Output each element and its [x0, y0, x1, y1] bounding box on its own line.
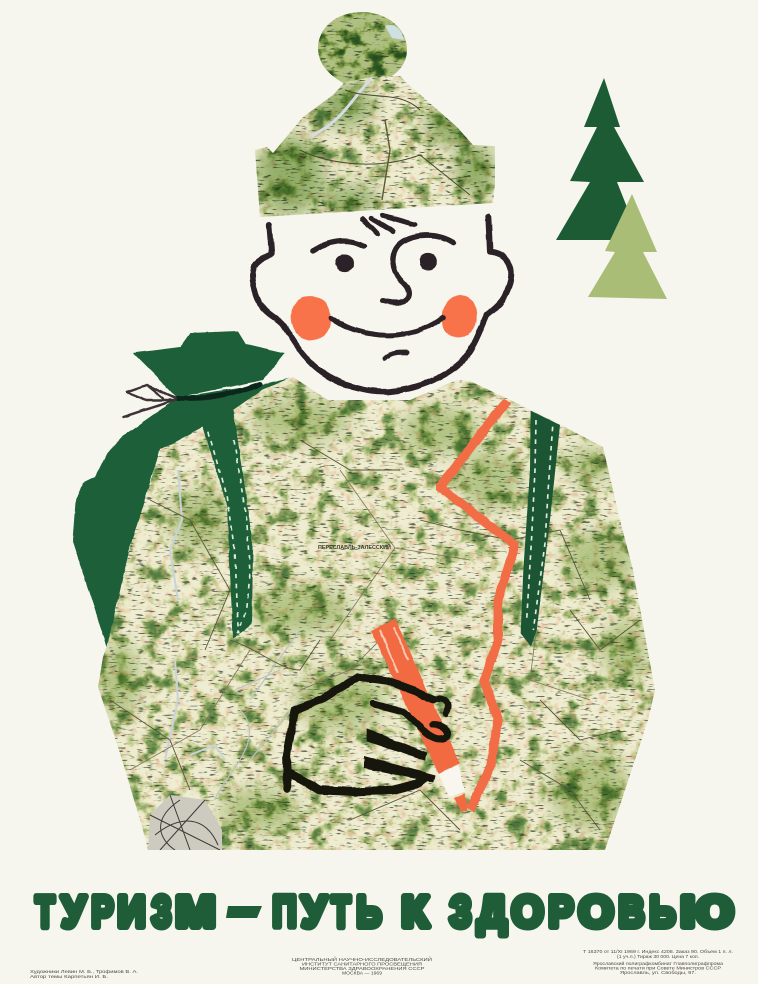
title: З — [152, 888, 172, 936]
rivers and roads — [110, 440, 640, 830]
title: Ю — [680, 888, 734, 936]
icon: green bundle and shoulder strap — [72, 331, 290, 647]
icon: pencil body — [371, 618, 460, 773]
icon: map-textured pompom — [318, 12, 407, 84]
credits: artists: Автор темы Карпетьян И. Б. — [30, 974, 108, 979]
icon: fir trees — [556, 78, 667, 299]
pencil tip — [438, 765, 465, 797]
title: У — [62, 888, 86, 936]
title — [36, 888, 734, 936]
bundle knot top — [133, 331, 285, 398]
icon: right cheek — [442, 295, 477, 337]
face — [253, 215, 511, 392]
icon: hand drawing — [287, 677, 448, 792]
credits: institute: ИНСТИТУТ САНИТАРНОГО ПРОСВЕЩЕНИЯ — [302, 962, 422, 966]
string ends — [123, 385, 176, 417]
pencil highlights — [380, 627, 408, 673]
hair strokes — [363, 215, 415, 234]
pencil and hand — [287, 618, 467, 812]
credits: institute — [292, 955, 432, 976]
title: Р — [548, 888, 574, 936]
icon: light fir tree — [588, 194, 667, 299]
title: У — [302, 888, 327, 936]
credits: printing details: (1 уч.л.) Тираж 30 000. Цена 7 коп. — [617, 954, 699, 959]
chin mark — [385, 352, 407, 358]
panel: map-textured body — [95, 375, 657, 852]
title: Д — [478, 888, 506, 936]
title: Ь — [356, 888, 382, 936]
orange route line — [440, 401, 515, 810]
icon: left cheek — [291, 297, 331, 340]
title: О — [512, 888, 544, 936]
icon: right shoulder strap — [521, 411, 560, 647]
left eyebrow — [313, 241, 364, 251]
pencil point — [454, 793, 467, 812]
credits: institute: МИНИСТЕРСТВА ЗДРАВООХРАНЕНИЯ СССР — [300, 966, 424, 971]
credits: printing details: Ярославль, ул. Свободы, 97. — [620, 970, 696, 975]
right eye — [420, 253, 437, 270]
left eye — [335, 255, 354, 272]
tie line — [177, 384, 260, 398]
icon: dark fir tree — [556, 78, 644, 240]
title: В — [618, 888, 644, 936]
right brow and nose — [383, 235, 454, 303]
credits: institute: ЦЕНТРАЛЬНЫЙ НАУЧНО-ИССЛЕДОВАТЕЛЬСКИЙ — [292, 955, 432, 962]
credits: printing details: Комитета по печати при Совете Министров СССР — [595, 966, 721, 970]
title: И — [118, 888, 146, 936]
title: Т — [332, 888, 351, 936]
title: П — [272, 888, 296, 936]
credits: institute: МОСКВА — 1969 — [342, 970, 382, 976]
title: М — [176, 888, 216, 936]
credits: printing details — [583, 949, 733, 975]
title: К — [402, 888, 429, 936]
credits: artists — [30, 969, 138, 979]
map place label: ПЕРЕСЛАВЛЬ-ЗАЛЕССКИЙ — [318, 543, 391, 551]
green forest patches — [100, 398, 647, 832]
Moscow city patch — [148, 795, 222, 850]
bundle sack and strap — [72, 378, 290, 647]
smile — [331, 317, 443, 335]
title: Ь — [650, 888, 676, 936]
title: Т — [36, 888, 55, 936]
title: Р — [92, 888, 114, 936]
credits: printing details: Ярославский полиграфкомбинат Главполиграфпрома — [593, 960, 723, 966]
credits: artists: Художники Левин М. Б., Трофимов В. А. — [30, 969, 138, 974]
title: З — [450, 888, 472, 936]
face outline — [253, 217, 511, 392]
title: О — [578, 888, 614, 936]
credits: printing details: Т 16370 от 11/XI 1969 г. Индекс 4208. Заказ 90. Объем 1 п. л. — [583, 949, 733, 954]
strap stitches — [208, 432, 250, 633]
icon: map-textured hat — [253, 74, 497, 219]
